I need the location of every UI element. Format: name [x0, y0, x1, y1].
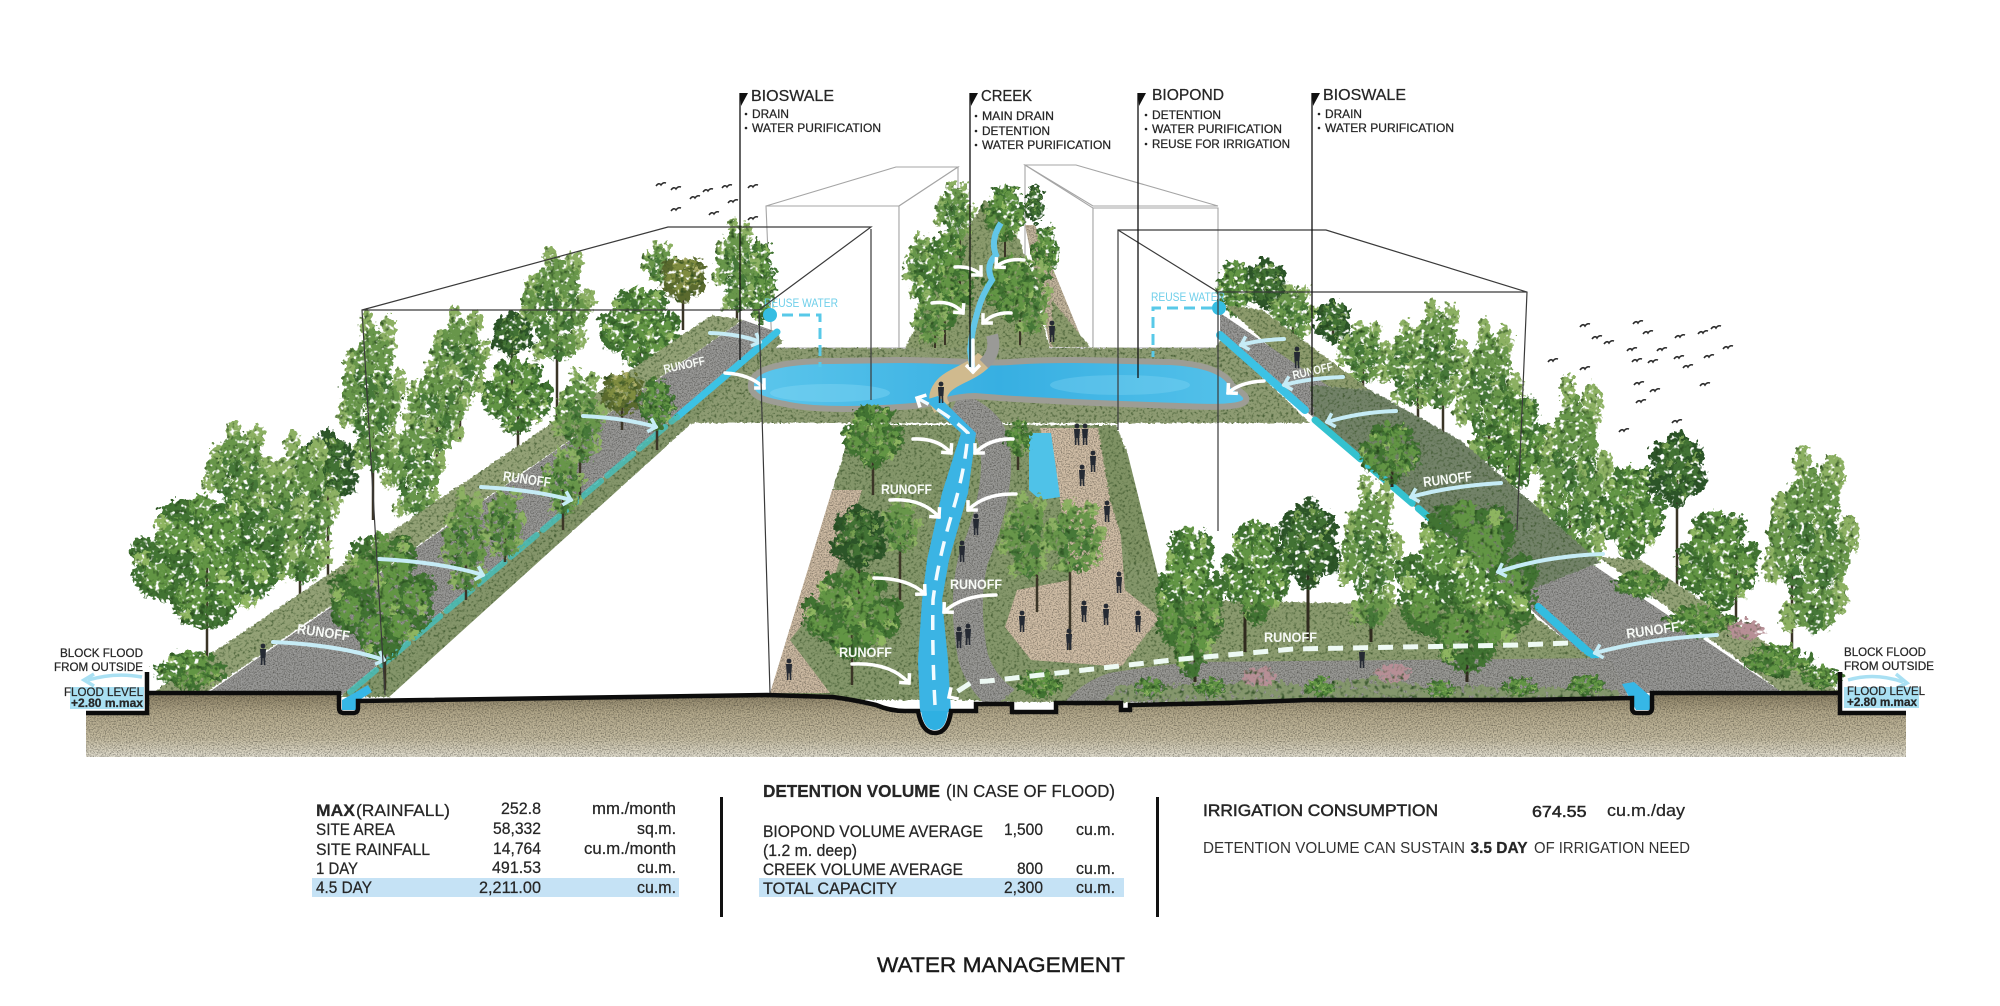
callout: left bioswale: WATER PURIFICATION — [752, 121, 881, 135]
left timber boardwalk — [770, 490, 862, 693]
table: rainfall: cu.m. — [637, 858, 676, 877]
trees: right grove behind the road — [1217, 259, 1859, 664]
table: rainfall: (RAINFALL) — [356, 801, 450, 820]
callout: right bioswale: DRAIN — [1325, 107, 1362, 121]
irrigation consumption: cu.m./day — [1607, 801, 1686, 820]
table: detention volume: BIOPOND VOLUME AVERAGE — [763, 822, 983, 841]
table: rainfall: 58,332 — [493, 819, 541, 838]
runoff labels: RUNOFF — [502, 468, 552, 490]
flood note right — [1844, 645, 1934, 709]
light blue runoff arrows — [273, 333, 1717, 660]
irrigation consumption: DETENTION VOLUME CAN SUSTAIN — [1203, 840, 1465, 857]
table: rainfall — [312, 799, 679, 897]
white building block right — [1121, 427, 1530, 640]
table: detention volume: (1.2 m. deep) — [763, 841, 857, 860]
flood note left: BLOCK FLOOD — [60, 646, 143, 660]
upper creek — [970, 223, 1001, 372]
runoff labels: RUNOFF — [662, 354, 706, 376]
flood note right: FROM OUTSIDE — [1844, 659, 1934, 673]
flood note left — [54, 646, 144, 710]
runoff labels: RUNOFF — [839, 644, 892, 660]
trees: near the left block — [153, 367, 675, 691]
section line — [86, 672, 1906, 733]
table: rainfall: 252.8 — [501, 799, 541, 818]
table: detention volume: cu.m. — [1076, 878, 1115, 897]
irrigation consumption: 674.55 — [1532, 804, 1587, 821]
flowering shrubs — [1241, 620, 1764, 686]
callout: left bioswale: BIOSWALE — [751, 88, 834, 105]
creek — [918, 396, 976, 712]
back building right — [1025, 165, 1218, 348]
trees: left grove behind the road — [129, 217, 776, 660]
roadside shrubs — [1612, 570, 1845, 690]
table: rainfall: mm./month — [592, 799, 676, 818]
right road with planting bands — [1220, 305, 1845, 693]
flood note left: +2.80 m.max — [71, 696, 143, 710]
creek centre dashed line with arrow — [917, 398, 968, 705]
reuse water left — [763, 296, 838, 367]
left bioswale — [350, 332, 777, 692]
flood note right: FLOOD LEVEL — [1847, 684, 1925, 698]
table: rainfall: 1 DAY — [316, 859, 358, 878]
birds: left flock — [656, 183, 758, 220]
foreground planting and gravel — [1000, 600, 1764, 702]
callout: right bioswale — [1312, 87, 1454, 415]
runoff labels: RUNOFF — [1291, 359, 1334, 382]
table: rainfall: SITE AREA — [316, 820, 396, 839]
dashed runoff line across foreground — [949, 643, 1568, 697]
runoff labels: RUNOFF — [1625, 618, 1680, 642]
callout: creek — [970, 88, 1111, 367]
people — [260, 321, 1365, 680]
planting edge — [1098, 428, 1174, 563]
gravel path — [954, 405, 1007, 702]
table: rainfall: 2,211.00 — [479, 878, 541, 897]
back creek corridor — [904, 181, 1090, 348]
irrigation consumption: OF IRRIGATION NEED — [1534, 840, 1690, 857]
flood note right: +2.80 m.max — [1847, 695, 1917, 709]
table: detention volume: 1,500 — [1004, 820, 1043, 839]
callout: creek: MAIN DRAIN — [982, 109, 1054, 123]
upper gravel path — [984, 335, 993, 364]
biopond lawn — [690, 338, 1310, 423]
table: detention volume: 800 — [1017, 859, 1043, 878]
detention highlight row — [759, 878, 1124, 897]
water in section channels — [342, 682, 1650, 730]
callout: creek: CREEK — [981, 88, 1033, 105]
wireframe building left — [362, 227, 871, 695]
runoff labels: RUNOFF — [881, 481, 932, 497]
table: rainfall: MAX — [316, 801, 356, 820]
table: detention volume: (IN CASE OF FLOOD) — [946, 781, 1115, 801]
biopond water — [751, 360, 1246, 409]
flood note left: FROM OUTSIDE — [54, 660, 143, 674]
table: detention volume: 2,300 — [1004, 878, 1043, 897]
table: detention volume — [759, 781, 1124, 898]
callout: biopond: WATER PURIFICATION — [1152, 122, 1282, 136]
flood note right: BLOCK FLOOD — [1844, 645, 1926, 659]
runoff labels: RUNOFF — [296, 620, 351, 644]
table: detention volume: CREEK VOLUME AVERAGE — [763, 860, 963, 879]
garden pool — [1029, 433, 1060, 500]
reuse water right: REUSE WATER — [1151, 290, 1225, 304]
reuse water left: REUSE WATER — [764, 296, 838, 310]
reuse water right — [1151, 290, 1226, 357]
central garden ground — [770, 405, 1200, 702]
callout: left bioswale: DRAIN — [752, 107, 789, 121]
callout: creek: WATER PURIFICATION — [982, 138, 1111, 152]
table: rainfall: 14,764 — [493, 839, 541, 858]
timber bridge — [938, 358, 985, 408]
table: detention volume: cu.m. — [1076, 820, 1115, 839]
table: rainfall: 491.53 — [492, 858, 541, 877]
runoff labels — [296, 354, 1680, 660]
ground section — [86, 672, 1906, 757]
birds: right flock — [1548, 321, 1733, 432]
runoff labels: RUNOFF — [950, 576, 1002, 592]
callout: right bioswale: WATER PURIFICATION — [1325, 121, 1454, 135]
runoff labels: RUNOFF — [1422, 468, 1473, 490]
callout: biopond: BIOPOND — [1152, 87, 1224, 104]
table: detention volume: DETENTION VOLUME — [763, 781, 940, 801]
irrigation consumption — [1203, 801, 1690, 857]
wireframe building right — [1118, 230, 1527, 531]
white runoff arrows — [725, 260, 1264, 683]
divider right — [1156, 797, 1159, 917]
trees: central garden — [801, 404, 1109, 685]
central timber plaza — [1005, 428, 1172, 667]
rainfall highlight row — [312, 878, 679, 897]
callout: biopond: REUSE FOR IRRIGATION — [1152, 137, 1290, 151]
title: WATER MANAGEMENT — [877, 954, 1125, 977]
callout: creek: DETENTION — [982, 124, 1050, 138]
table: detention volume: TOTAL CAPACITY — [763, 879, 897, 898]
irrigation consumption: IRRIGATION CONSUMPTION — [1203, 801, 1438, 820]
runoff labels: RUNOFF — [1264, 629, 1317, 645]
table: rainfall: cu.m./month — [584, 839, 676, 858]
table: detention volume: cu.m. — [1076, 859, 1115, 878]
callout: biopond — [1138, 87, 1290, 378]
planted area over the road — [1310, 385, 1600, 590]
table: rainfall: sq.m. — [637, 819, 676, 838]
trees: right foreground — [1156, 422, 1538, 682]
callout: left bioswale — [740, 88, 881, 360]
divider left — [720, 797, 723, 917]
irrigation consumption: 3.5 DAY — [1470, 840, 1528, 857]
back building left — [766, 167, 958, 348]
low foreground shrubs — [1017, 670, 1603, 699]
table: rainfall: cu.m. — [637, 878, 676, 897]
white building block left — [389, 425, 852, 697]
right bioswale — [1220, 335, 1595, 658]
flood note left: FLOOD LEVEL — [64, 685, 143, 699]
table: rainfall: 4.5 DAY — [316, 878, 372, 897]
callout: right bioswale: BIOSWALE — [1323, 87, 1406, 104]
table: rainfall: SITE RAINFALL — [316, 840, 430, 859]
left road with planting bands — [150, 315, 782, 697]
callout: biopond: DETENTION — [1152, 108, 1221, 122]
